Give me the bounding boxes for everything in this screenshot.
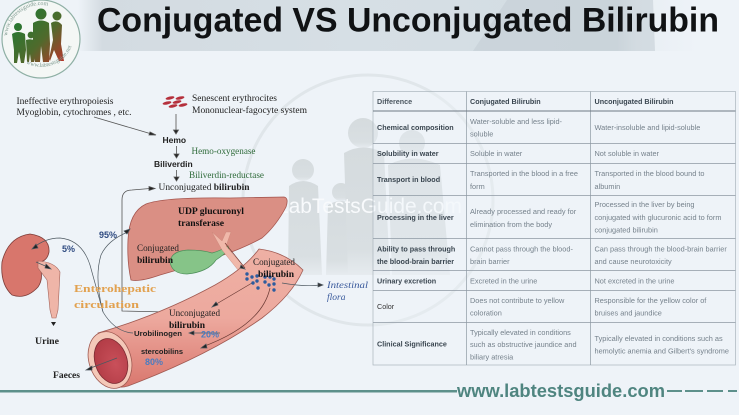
row: blood-brain barrier: Ability to pass through (377, 244, 455, 254)
row: blood-brain barrier: Can pass through the blood-brain barrier (594, 244, 727, 254)
label: mononuclear system: Mononuclear-fagocyte system (192, 105, 308, 116)
label: myoglobin: Myoglobin, cytochromes , etc. (16, 108, 132, 118)
row: urinary excretion (377, 276, 675, 286)
row: clinical significance: hemolytic anemia and Gilbert's syndrome (594, 346, 729, 356)
label: hemo: Hemo (162, 135, 186, 145)
row: urinary excretion: Urinary excretion (377, 276, 436, 286)
table header row: Unconjugated Bilirubin (594, 97, 674, 106)
title: Conjugated VS Unconjugated Bilirubin (97, 2, 719, 40)
label: ineffective erythropoiesis: Ineffective erythropoiesis (16, 96, 114, 107)
row: transport in blood: Transported in the blood bound to (594, 169, 704, 178)
row: blood-brain barrier: the blood-brain barrier (377, 257, 454, 266)
logo badge (1, 0, 81, 79)
intestine (81, 249, 303, 394)
row: processing in the liver: Processing in the liver (377, 213, 454, 222)
row: transport in blood (377, 169, 704, 191)
row: transport in blood: albumin (594, 182, 620, 191)
label: enterohepatic: Enterohepatic (74, 283, 156, 295)
logo family figures (12, 8, 64, 63)
row: urinary excretion: Not excreted in the urine (594, 276, 675, 286)
gallbladder (170, 246, 229, 274)
row: clinical significance: Typically elevated in conditions (470, 328, 571, 337)
row: color: coloration (470, 308, 502, 318)
row: chemical composition (377, 117, 700, 138)
row: chemical composition: Water-soluble and less lipid- (470, 117, 563, 126)
label: unconjugated bilirubin top: Unconjugated bilirubin (158, 183, 250, 193)
row: color: Color (377, 302, 395, 311)
row: processing in the liver (377, 200, 721, 234)
row: clinical significance: biliary atresia (470, 352, 514, 362)
label: 95 percent: 95% (99, 230, 118, 241)
header band (78, 0, 698, 51)
label: unconjugated lower: Unconjugated (169, 309, 220, 319)
table header row: Conjugated Bilirubin (470, 97, 541, 106)
row: processing in the liver: Processed in the liver by being (594, 200, 695, 209)
label: conjugated intestine: Conjugated (253, 258, 295, 268)
row: clinical significance: Clinical Significance (377, 340, 447, 348)
row: blood-brain barrier: Cannot pass through the blood- (470, 244, 573, 254)
label: bilirubin lower: bilirubin (169, 321, 206, 331)
label: bilirubin intestine: bilirubin (258, 270, 295, 280)
row: urinary excretion: Excreted in the urine (470, 276, 537, 286)
table header row (377, 97, 674, 106)
row: color (377, 296, 707, 318)
label: urobilinogen: Urobilinogen (134, 329, 182, 338)
row: chemical composition: Chemical composition (377, 123, 454, 132)
label: hemo-oxygenase: Hemo-oxygenase (192, 146, 256, 156)
label: stercobilins: stercobilins (141, 347, 183, 356)
row: transport in blood: Transport in blood (377, 175, 440, 184)
enterohepatic circulation arrows (32, 229, 323, 370)
row: blood-brain barrier: brain barrier (470, 257, 510, 266)
footer rule (0, 390, 737, 392)
icon: red blood cells (162, 96, 188, 108)
label: biliverdin: Biliverdin (154, 159, 193, 169)
row: solubility in water: Solubility in water (377, 149, 439, 158)
table header row: Difference (377, 97, 412, 106)
row: solubility in water: Not soluble in water (594, 149, 660, 158)
row: solubility in water (377, 149, 660, 158)
label: biliverdin-reductase: Biliverdin-reductase (189, 170, 264, 180)
label: transferase: transferase (178, 219, 224, 229)
footer url: www.labtestsguide.com (456, 381, 665, 401)
label: 5 percent: 5% (62, 244, 76, 255)
bile duct (212, 232, 245, 270)
label: faeces: Faeces (53, 371, 80, 381)
label: udp glucuronyl: UDP glucuronyl (178, 207, 244, 217)
row: chemical composition: Water-insoluble and lipid-soluble (594, 123, 700, 132)
label: conjugated liver: Conjugated (137, 244, 179, 254)
logo circular text lower: www.labtestsguide.net (27, 46, 72, 67)
watermark text: LabTestsGuide.com (277, 195, 462, 218)
flow arrows (94, 114, 179, 312)
row: processing in the liver: conjugated with glucuronic acid to form (594, 213, 721, 222)
row: transport in blood: Transported in the blood in a free (470, 169, 578, 178)
label: flora: flora (327, 292, 346, 303)
label: senescent erythrocites: Senescent erythrocites (192, 94, 277, 104)
flow labels (16, 94, 308, 193)
row: processing in the liver: Already processed and ready for (470, 207, 577, 216)
label: urine: Urine (35, 337, 59, 347)
row: chemical composition: soluble (470, 130, 493, 138)
row: color: Does not contribute to yellow (470, 296, 565, 305)
bilirubin dots (245, 272, 276, 292)
logo circular text: www.labtestsguide.com (4, 2, 48, 36)
liver (128, 197, 287, 280)
row: processing in the liver: elimination from the body (470, 220, 552, 229)
row: transport in blood: form (470, 182, 485, 191)
row: solubility in water: Soluble in water (470, 149, 523, 158)
row: clinical significance: Typically elevated in conditions such as (594, 334, 723, 343)
label: bilirubin liver: bilirubin (137, 256, 174, 266)
row: color: bruises and jaundice (594, 308, 662, 318)
row: blood-brain barrier: and cause neurotoxicity (594, 257, 672, 266)
row: processing in the liver: conjugated bilirubin (594, 226, 658, 234)
label: intestinal: Intestinal (326, 281, 368, 291)
row: clinical significance (377, 328, 729, 362)
comparison table (373, 92, 736, 365)
label: 20 percent: 20% (201, 330, 220, 340)
label: 80 percent: 80% (145, 357, 164, 368)
kidney and ureter (2, 234, 60, 326)
diagram labels (35, 207, 368, 381)
row: color: Responsible for the yellow color of (594, 296, 707, 305)
label: circulation: circulation (74, 299, 139, 311)
row: clinical significance: such as obstructive jaundice and (470, 340, 577, 349)
row: blood-brain barrier (377, 244, 727, 266)
watermark: family silhouette (243, 75, 493, 325)
